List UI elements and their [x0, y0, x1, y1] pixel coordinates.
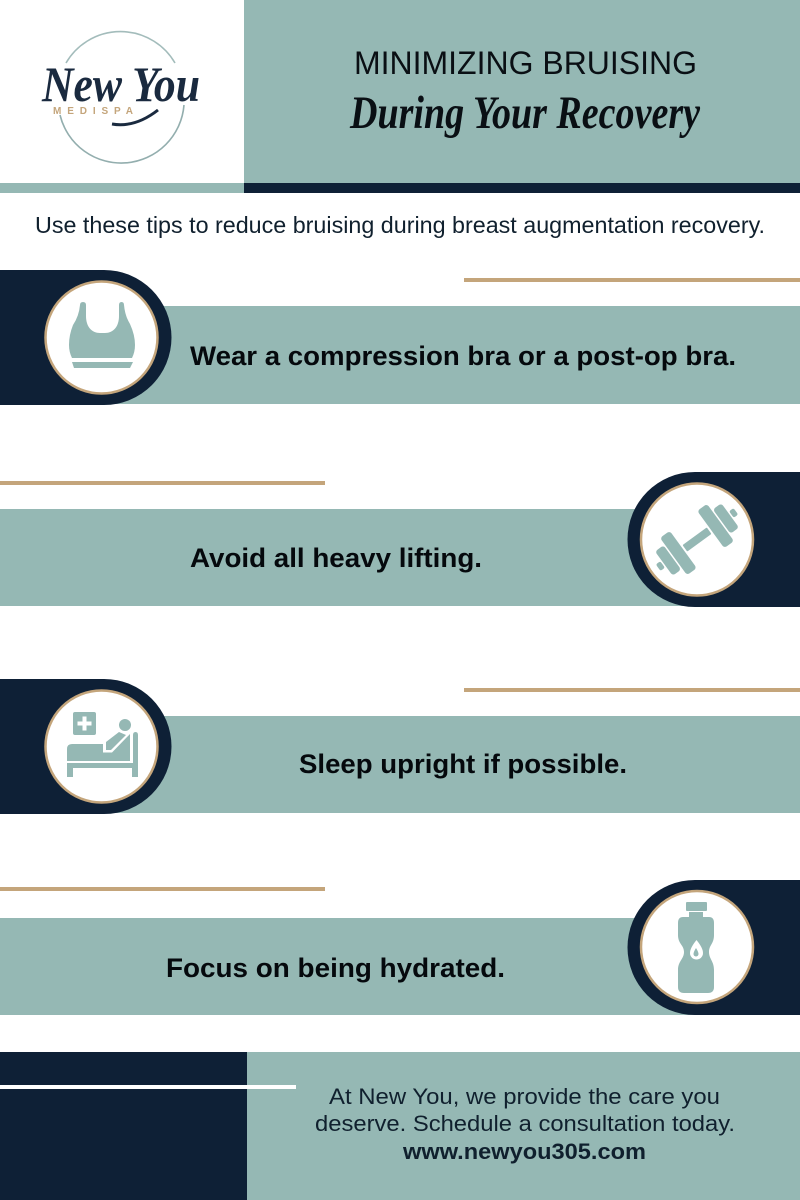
footer text line 2: deserve. Schedule a consultation today.	[315, 1111, 735, 1136]
footer website: www.newyou305.com	[402, 1139, 646, 1164]
title: Minimizing Bruising: MINIMIZING BRUISING	[354, 45, 697, 81]
panel: footer	[0, 1052, 800, 1200]
panel: tip 3 sleep upright	[0, 679, 800, 814]
icon: hospital bed	[46, 690, 158, 802]
tip text 4: Focus on being hydrated.	[166, 953, 505, 983]
intro text: Use these tips to reduce bruising during breast augmentation recovery.	[35, 212, 765, 238]
tip text 3: Sleep upright if possible.	[299, 749, 627, 779]
logo: New You Medispa: MEDISPA	[53, 106, 133, 117]
tip text 2: Avoid all heavy lifting.	[190, 543, 482, 573]
panel: header	[0, 0, 800, 193]
title: During Your Recovery: During Your Recovery	[349, 87, 700, 139]
icon: sports bra	[46, 282, 158, 394]
icon: dumbbell	[641, 484, 753, 596]
footer text line 1: At New You, we provide the care you	[329, 1084, 720, 1109]
panel: tip 4 hydration	[0, 880, 800, 1015]
logo: New You Medispa	[41, 32, 200, 163]
panel: tip 1 compression bra	[0, 270, 800, 405]
logo: New You Medispa: New You	[41, 56, 200, 112]
panel: tip 2 heavy lifting	[0, 472, 800, 607]
tip text 1: Wear a compression bra or a post-op bra.	[190, 341, 736, 371]
icon: water bottle	[641, 891, 753, 1003]
